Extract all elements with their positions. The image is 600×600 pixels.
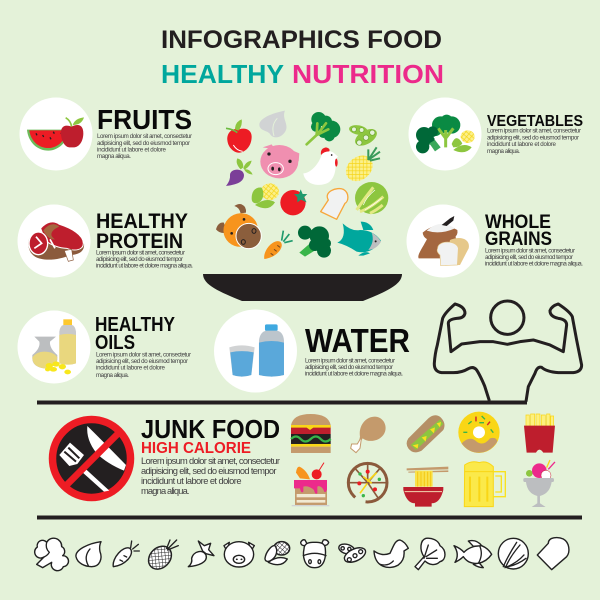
- text block: junk food: [141, 456, 280, 496]
- text block: fruits: Lorem ipsum dolor sit amet, consectetur: [97, 133, 192, 140]
- icon: chicken: [303, 147, 338, 185]
- text block: water: incididunt ut labore et dolore magna aliqua.: [305, 370, 403, 378]
- icon: tomato: [280, 189, 307, 215]
- icon: muscular figure outline: [434, 301, 582, 402]
- title: INFOGRAPHICS FOOD: [161, 26, 442, 54]
- outline: beet: [188, 541, 214, 567]
- icon: beer mug: [464, 462, 505, 507]
- outline: bok choy: [415, 538, 445, 570]
- heading: water: WATER: [305, 322, 410, 359]
- icon: cow: [216, 204, 263, 252]
- icon: bok choy: [307, 112, 340, 144]
- outline: broccoli: [35, 538, 69, 571]
- text block: oils: adipisicing elit, sed do eiusmod tempor: [96, 358, 188, 365]
- text block: oils: [96, 352, 191, 379]
- icon: ice cream: [523, 460, 555, 507]
- panel: whole grains: [406, 204, 583, 278]
- heading: vegetables: VEGETABLES: [487, 113, 583, 130]
- icon: pig: [260, 144, 299, 178]
- heading: junk food: JUNK FOOD: [141, 414, 280, 444]
- icon: meat: [28, 222, 84, 261]
- heading: healthy oils: OILS: [95, 332, 135, 354]
- text block: vegetables: adipisicing elit, sed do eiusmod tempor: [487, 134, 579, 142]
- heading: high calorie: HIGH CALORIE: [141, 440, 251, 457]
- text block: junk food: adipisicing elit, sed do eiusmod tempor: [141, 466, 276, 476]
- text block: protein: adipisicing elit, sed do eiusmod tempor: [96, 256, 183, 263]
- text block: water: [305, 358, 403, 378]
- icon: lettuce: [355, 182, 388, 214]
- icon: vegetables: [416, 115, 475, 153]
- icon: noodle bowl: [403, 467, 448, 507]
- text block: whole grains: adipisicing elit, sed do eiusmod tempor: [485, 254, 573, 261]
- heading: healthy oils: HEALTHY: [95, 314, 176, 336]
- heading: whole grains: GRAINS: [485, 228, 552, 250]
- icon: corn: [252, 183, 279, 208]
- text block: vegetables: Lorem ipsum dolor sit amet, consectetur: [487, 128, 581, 134]
- text block: protein: [96, 250, 193, 270]
- text block: vegetables: incididunt ut labore et dolore: [487, 141, 557, 148]
- icon: watermelon and apple: [27, 117, 84, 151]
- text block: fruits: adipisicing elit, sed do eiusmod tempor: [97, 140, 190, 147]
- outline: garlic: [76, 542, 101, 567]
- title: [161, 26, 444, 89]
- text block: junk food: incididunt ut labore et dolore: [141, 476, 242, 486]
- outline: pig: [224, 542, 254, 567]
- icon: french fries: [524, 414, 555, 453]
- icon: no food sign: [52, 420, 130, 498]
- text block: fruits: magna aliqua.: [97, 153, 131, 160]
- icon: burger: [291, 414, 331, 453]
- icon: water glass and bottle: [229, 324, 284, 377]
- text block: vegetables: magna aliqua.: [487, 148, 520, 155]
- text block: water: Lorem ipsum dolor sit amet, consectetur: [305, 358, 395, 364]
- panel: fruits: [20, 98, 192, 170]
- icon: beet: [226, 158, 253, 186]
- icon: bread: [321, 189, 348, 219]
- panel: healthy protein: [18, 204, 193, 278]
- text block: oils: incididunt ut labore et dolore: [96, 364, 166, 372]
- title: NUTRITION: [292, 59, 444, 89]
- title: HEALTHY: [161, 59, 284, 89]
- outline: peas: [338, 542, 368, 565]
- outline: carrot: [113, 541, 139, 567]
- text block: whole grains: [485, 248, 583, 268]
- icon: apple: [226, 119, 252, 153]
- outline icons row: [35, 538, 569, 574]
- text block: whole grains: incididunt ut labore et dolore magna aliqua.: [485, 260, 583, 268]
- heading: healthy oils: [95, 314, 176, 354]
- outline: cow: [301, 540, 329, 568]
- text block: fruits: incididunt ut labore et dolore: [97, 146, 167, 154]
- pan: [203, 274, 402, 301]
- heading: whole grains: WHOLE: [485, 211, 551, 233]
- text block: junk food: magna aliqua.: [141, 486, 190, 496]
- outline: lettuce: [498, 538, 528, 569]
- panel: vegetables: [408, 98, 583, 170]
- outline: bread: [537, 538, 569, 570]
- junk food icons: [291, 412, 555, 507]
- panel: water: [214, 310, 410, 392]
- icon: hot dog: [407, 415, 445, 452]
- heading: fruits: FRUITS: [97, 104, 192, 135]
- icon: cake: [292, 463, 329, 506]
- outline: corn: [265, 542, 290, 565]
- icon: broccoli: [298, 226, 331, 258]
- text block: junk food: Lorem ipsum dolor sit amet, consectetur: [141, 456, 280, 466]
- heading: healthy protein: [96, 209, 188, 253]
- icon: fish: [337, 222, 381, 256]
- food cluster: [216, 111, 388, 259]
- icon: pizza: [348, 463, 387, 507]
- text block: oils: Lorem ipsum dolor sit amet, consectetur: [96, 352, 191, 358]
- icon: donut: [458, 412, 500, 453]
- icon: grain sack and bread: [418, 216, 469, 266]
- divider top: [37, 400, 527, 404]
- text block: vegetables: [487, 128, 581, 155]
- panel: healthy oils: [18, 310, 191, 384]
- icon: carrot: [264, 231, 293, 259]
- icon: pineapple: [341, 147, 380, 186]
- outline: chicken: [374, 540, 408, 567]
- outline: pineapple: [144, 540, 178, 574]
- heading: healthy protein: PROTEIN: [96, 229, 183, 253]
- heading: whole grains: [485, 211, 552, 250]
- icon: oil bottle and jug: [32, 319, 76, 374]
- outline: fish: [454, 541, 492, 568]
- icon: garlic: [259, 111, 286, 137]
- icon: peas: [348, 124, 380, 149]
- text block: protein: Lorem ipsum dolor sit amet, consectetur: [96, 250, 185, 256]
- text block: whole grains: Lorem ipsum dolor sit amet, consectetur: [485, 248, 575, 254]
- text block: fruits: [97, 133, 192, 160]
- heading: healthy protein: HEALTHY: [96, 209, 188, 233]
- icon: chicken drumstick: [351, 417, 386, 453]
- text block: water: adipisicing elit, sed do eiusmod tempor: [305, 364, 393, 371]
- text block: oils: magna aliqua.: [96, 372, 129, 379]
- text block: protein: incididunt ut labore et dolore magna aliqua.: [96, 262, 193, 270]
- divider bottom: [37, 516, 582, 520]
